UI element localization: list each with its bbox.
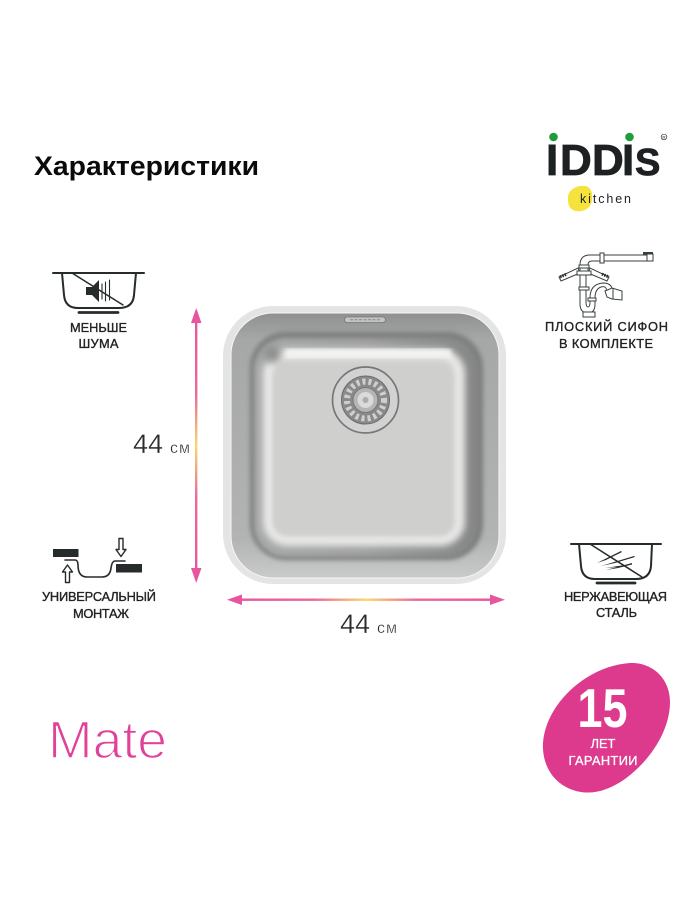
badge blob	[543, 663, 670, 793]
warranty badge	[543, 663, 670, 793]
label: universal mounting	[42, 589, 156, 621]
warranty text	[568, 736, 638, 768]
feature: universal mounting	[42, 538, 156, 621]
width label: 44 cm: 44 см	[340, 609, 398, 639]
title: Характеристики	[34, 151, 259, 181]
sink outer rim	[223, 306, 506, 584]
warranty text: ГАРАНТИИ	[568, 753, 638, 768]
label: flat siphon included: В КОМПЛЕКТЕ	[559, 336, 653, 351]
icon: siphon	[559, 252, 653, 317]
label: stainless steel: СТАЛЬ	[596, 605, 637, 620]
icon: mounting	[53, 538, 142, 582]
logo: IDDIS kitchen	[546, 133, 667, 211]
feature: less noise	[53, 273, 144, 351]
sink drain	[332, 367, 398, 433]
label: stainless steel	[564, 589, 667, 620]
logo: IDDIS kitchen: kitchen	[580, 192, 631, 206]
sink bowl walls	[231, 313, 499, 578]
label: flat siphon included: ПЛОСКИЙ СИФОН	[545, 319, 668, 334]
model name: Mate	[48, 711, 167, 770]
arrow: height dimension	[191, 308, 202, 583]
warranty text: ЛЕТ	[591, 736, 616, 751]
logo: IDDIS kitchen: R	[662, 135, 666, 140]
warranty years: 15	[578, 677, 628, 739]
arrow: width dimension	[227, 594, 505, 605]
height label: 44 cm: 44 см	[133, 429, 191, 459]
feature: flat siphon included	[545, 252, 668, 351]
label: less noise: МЕНЬШЕ	[70, 320, 127, 335]
sink logo plate	[344, 317, 386, 322]
icon: quiet sink	[53, 273, 144, 312]
sink photo	[223, 306, 506, 584]
label: flat siphon included	[545, 319, 668, 351]
label: universal mounting: УНИВЕРСАЛЬНЫЙ	[42, 589, 156, 604]
label: stainless steel: НЕРЖАВЕЮЩАЯ	[564, 589, 667, 604]
label: less noise	[70, 320, 127, 351]
label: universal mounting: МОНТАЖ	[73, 606, 129, 621]
logo: IDDIS kitchen: S	[635, 142, 660, 184]
label: less noise: ШУМА	[78, 336, 119, 351]
feature: stainless steel	[564, 544, 667, 620]
sink basin shading	[250, 332, 483, 560]
logo: IDDIS kitchen: IDDI	[546, 136, 634, 185]
icon: steel sink	[571, 544, 661, 583]
